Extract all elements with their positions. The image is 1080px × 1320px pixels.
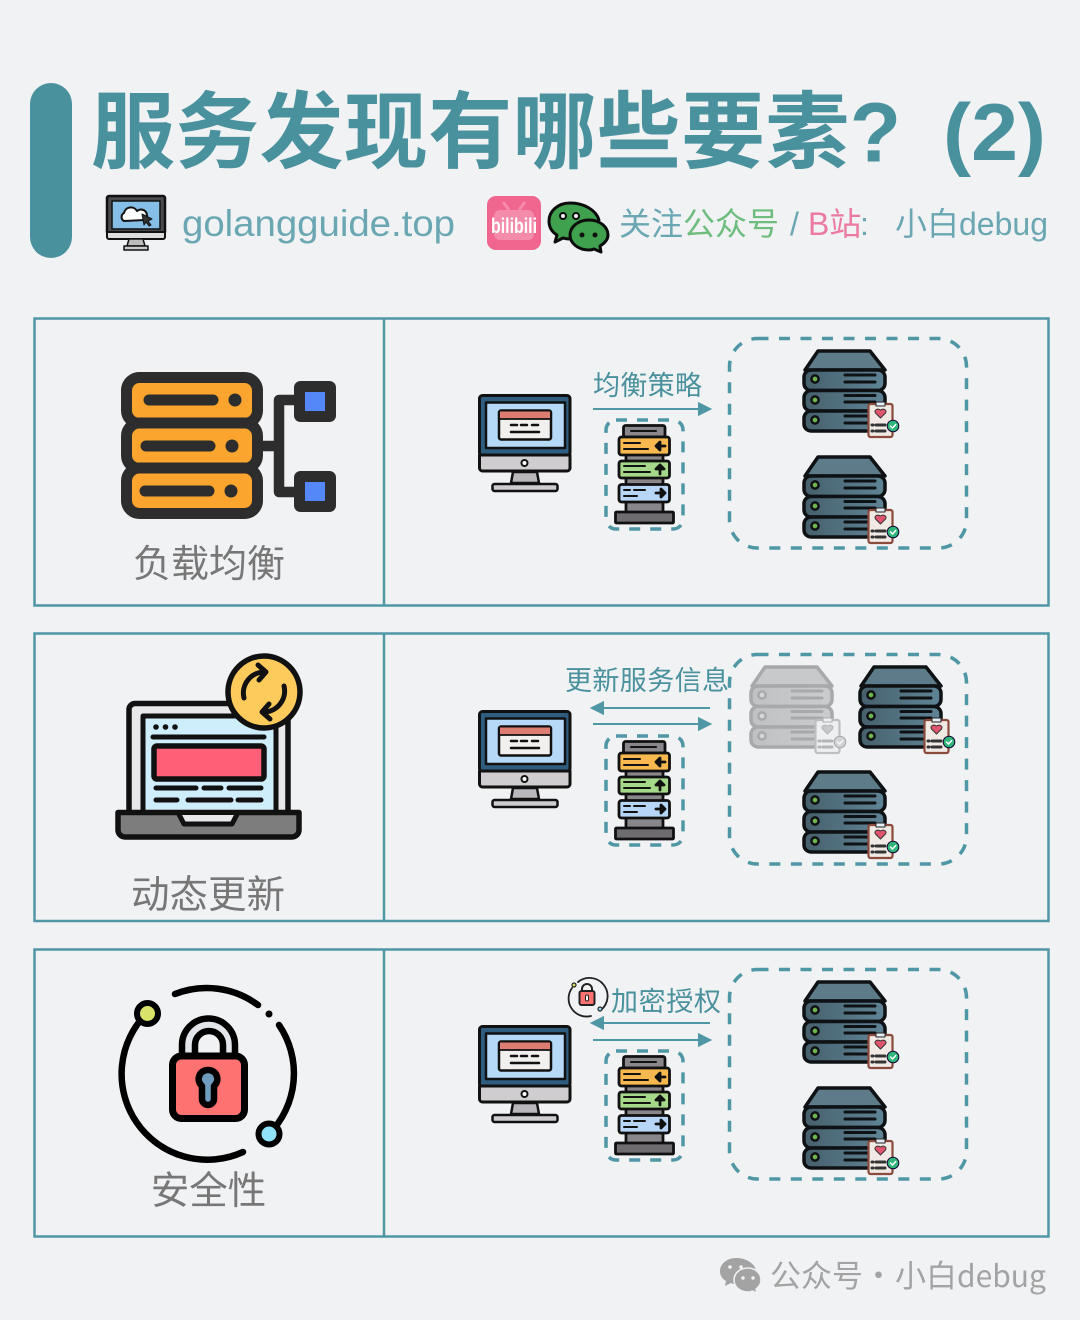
- icon: registry rack: [606, 736, 683, 845]
- follow text: 公众号: [683, 206, 779, 242]
- arrow label: 均衡策略: [593, 371, 702, 401]
- server group: [730, 338, 966, 548]
- follow text: 关注: [619, 206, 683, 242]
- icon: laptop with refresh: [118, 656, 300, 837]
- icon: bilibili: [487, 196, 541, 250]
- icon: website monitor: [107, 196, 165, 250]
- follow text: 小白debug: [895, 206, 1048, 242]
- arrow label: 加密授权: [611, 987, 721, 1017]
- arrow: left: [592, 702, 710, 714]
- arrow: right: [593, 718, 710, 730]
- panel: load balancing: [34, 318, 1048, 606]
- icon: registry rack: [606, 420, 683, 529]
- watermark text: 公众号: [770, 1251, 863, 1296]
- follow text: /: [790, 206, 799, 242]
- arrow: left: [592, 1018, 710, 1028]
- arrow label: 更新服务信息: [565, 666, 729, 696]
- icon: wechat: [549, 203, 608, 252]
- icon: padlock with orbit: [122, 988, 294, 1160]
- icon: client monitor: [480, 712, 570, 807]
- server group: [730, 970, 966, 1179]
- title number: (2): [943, 88, 1046, 178]
- title: 服务发现有哪些要素?: [91, 86, 901, 180]
- header accent bar: [30, 83, 72, 258]
- website url: golangguide.top: [182, 202, 455, 244]
- watermark text: ·: [863, 1251, 894, 1296]
- watermark text: 小白: [895, 1251, 957, 1296]
- icon: registry rack: [606, 1051, 683, 1160]
- follow text: :: [860, 206, 869, 242]
- follow text: B站: [808, 206, 861, 242]
- arrow: right: [593, 1034, 710, 1046]
- panel: dynamic update: [34, 634, 1048, 921]
- icon: server stack with nodes: [126, 378, 330, 514]
- icon: watermark wechat: [720, 1258, 761, 1293]
- watermark text: debug: [957, 1252, 1046, 1296]
- panel frame: [34, 950, 1048, 1236]
- icon: client monitor: [480, 1026, 570, 1122]
- label: 负载均衡: [133, 544, 285, 586]
- server group: [730, 654, 966, 864]
- panel: security: [34, 950, 1048, 1236]
- icon: bilibili: bilibili: [491, 215, 537, 238]
- panel frame: [34, 318, 1048, 606]
- icon: mini padlock: [569, 978, 608, 1017]
- arrow: [593, 404, 710, 414]
- label: 安全性: [151, 1170, 266, 1213]
- label: 动态更新: [131, 874, 285, 917]
- panel frame: [34, 634, 1048, 921]
- icon: client monitor: [480, 396, 570, 491]
